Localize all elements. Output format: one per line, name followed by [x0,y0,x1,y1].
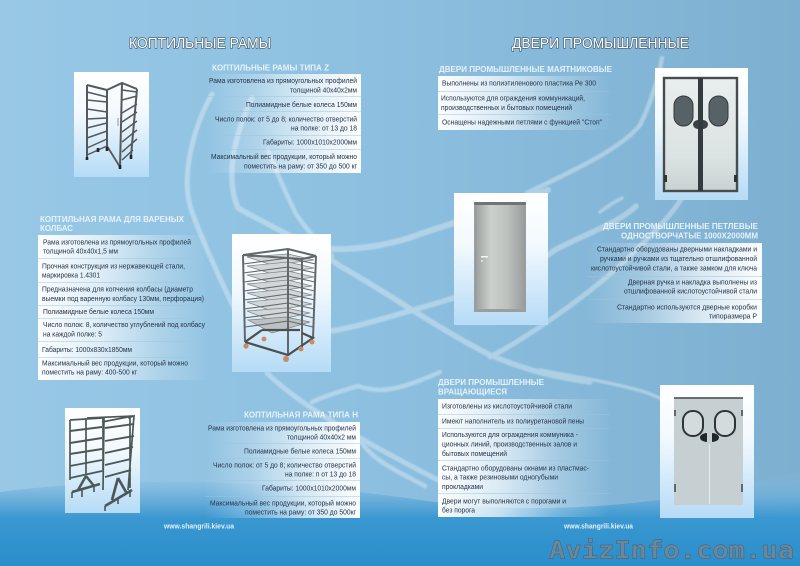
panel: frame type H specs: Полиамидные белые колеса 150мм [244,446,356,455]
panel: sausage frame specs: Максимальный вес продукции, который можно [42,358,188,367]
watermark: AvizInfo.com.ua [549,536,794,564]
panel: hinged door specs [588,243,762,323]
panel: rotating door specs: Изготовлены из кислотоустойчивой стали [442,401,572,410]
panel: rotating door specs [438,399,610,517]
panel: pendulum door specs [438,76,610,130]
panel: sausage frame specs: маркировка 1.4301 [42,270,100,279]
panel: sausage frame specs: на каждой полке: 5 [43,329,102,338]
panel: sausage frame specs: поместить на раму: 400-500 кг [42,368,137,377]
panel: frame type Z specs: Число полок: от 5 до 8; количество отверстий [215,114,357,123]
photo: pendulum double door [655,68,748,200]
panel: frame type H specs: поместить на раму: от 350 до 500кг [245,508,356,517]
panel: hinged door specs: типоразмера Р [709,312,757,321]
panel: rotating door specs: Стандартно оборудованы окнами из пластмас- [442,463,589,472]
panel: sausage frame specs: Число полок: 8, количество углублений под колбасу [43,320,205,329]
panel: rotating door specs: ционных линий, производственных залов и [442,440,577,449]
panel: pendulum door specs: Используются для ограждения коммуникаций, [441,94,585,103]
panel: frame type H specs: Максимальный вес продукции, который можно [210,498,356,507]
panel: rotating door specs: бытовых помещений [442,449,507,458]
panel: frame type Z specs: толщиной 40х40х2мм [290,85,357,94]
panel: frame type H specs: Рама изготовлена из прямоугольных профилей [208,423,356,432]
panel: rotating door specs: без порога [442,506,476,515]
panel: rotating door specs: Используются для ограждения коммуника - [442,430,578,439]
subheading: hinged single-leaf doors [603,221,758,240]
panel: frame type H specs: на полке: п от 13 до 18 [285,470,356,479]
panel: sausage frame specs: Предназначена для копчения колбасы (диаметр [42,284,193,293]
subheading: frame type Z: КОПТИЛЬНЫЕ РАМЫ ТИПА Z [212,62,329,72]
panel: hinged door specs: кислотоустойчивой стали, а также замком для ключа [591,263,758,272]
panel: sausage frame specs: Полиамидные белые колеса 150мм [43,307,154,316]
website link: right: www.shangrili.kiev.ua [563,521,634,530]
panel: pendulum door specs: производственных и бытовых помещений [441,103,572,112]
panel: pendulum door specs: Оснащены надежными петлями с функцией "Стоп" [442,117,602,126]
photo: frame type Z [74,72,149,177]
panel: sausage frame specs: выемки под варенную колбасу 130мм, перфорация) [42,294,204,303]
panel: hinged door specs: ручками и ручками из тщательно отшлифованной [600,254,757,263]
panel: rotating door specs: сы, а также резиновыми одногубыми [442,473,558,482]
panel: frame type H specs: толщиной 40х40х2 мм [287,433,356,442]
section title: industrial doors: ДВЕРИ ПРОМЫШЛЕННЫЕ [512,35,689,52]
panel: hinged door specs: Дверная ручка и накладка выполнены из [628,277,757,286]
website link: left: www.shangrili.kiev.ua [163,521,235,530]
subheading: frame type H: КОПТИЛЬНАЯ РАМА ТИПА Н [244,409,358,419]
panel: hinged door specs: Стандартно используются дверные коробки [617,302,757,311]
panel: sausage frame specs: Прочная конструкция из нержавеющей стали, [42,261,185,270]
photo: sausage frame with trays [232,234,331,372]
subheading: hinged single-leaf doors: ОДНОСТВОРЧАТЫЕ 1000Х2000ММ [621,230,758,240]
panel: frame type H specs: Число полок: от 5 до 8; количество отверстий [213,460,356,469]
panel: sausage frame specs: толщиной 40х40х1,5 мм [43,247,118,256]
panel: sausage frame specs: Габариты: 1000х830х1850мм [42,345,132,354]
panel: sausage frame specs: Рама изготовлена из прямоугольных профилей [43,237,191,246]
subheading: rotating doors: ДВЕРИ ПРОМЫШЛЕННЫЕ [438,377,544,387]
panel: frame type Z specs [205,74,361,173]
section title: smoking frames: КОПТИЛЬНЫЕ РАМЫ [129,35,271,52]
subheading: rotating doors: ВРАЩАЮЩИЕСЯ [438,386,507,396]
panel: hinged door specs: Стандартно оборудованы дверными накладками и [597,245,757,254]
panel: rotating door specs: Двери могут выполняются с порогами и [442,496,566,505]
panel: hinged door specs: отшлифованной кислотоустойчивой стали [624,286,757,295]
panel: pendulum door specs: Выполнены из полиэтиленового пластика Ре 300 [442,78,596,87]
panel: rotating door specs: Имеют наполнитель из полиуретановой пены [442,416,584,425]
subheading: pendulum doors: ДВЕРИ ПРОМЫШЛЕННЫЕ МАЯТНИКОВЫЕ [439,64,612,74]
panel: frame type H specs: Габариты: 1000х1010х2000мм [262,483,356,492]
photo: rotating double door [660,385,754,518]
panel: frame type Z specs: Габариты: 1000х1010х2000мм [263,138,357,147]
panel: rotating door specs: прокладками [442,482,483,491]
panel: frame type H specs [205,422,360,518]
subheading: frame for boiled sausages [40,214,184,233]
photo: frame type H [65,408,140,513]
background bottom wave [0,470,800,566]
photo: stainless single door [454,193,548,325]
panel: frame type Z specs: поместить на раму: от 350 до 500 кг [244,161,357,170]
subheading: hinged single-leaf doors: ДВЕРИ ПРОМЫШЛЕННЫЕ ПЕТЛЕВЫЕ [603,221,758,231]
panel: frame type Z specs: Максимальный вес продукции, который можно [211,152,357,161]
panel: frame type Z specs: Полиамидные белые колеса 150мм [246,100,357,109]
background swooshes [187,58,700,486]
subheading: frame for boiled sausages: КОПТИЛЬНАЯ РАМА ДЛЯ ВАРЕНЫХ [40,214,184,224]
subheading: frame for boiled sausages: КОЛБАС [40,223,73,233]
subheading: rotating doors [438,377,544,396]
panel: frame type Z specs: Рама изготовлена из прямоугольных профилей [209,76,357,85]
panel: sausage frame specs [38,235,210,380]
panel: frame type Z specs: на полке: от 13 до 18 [291,123,357,132]
